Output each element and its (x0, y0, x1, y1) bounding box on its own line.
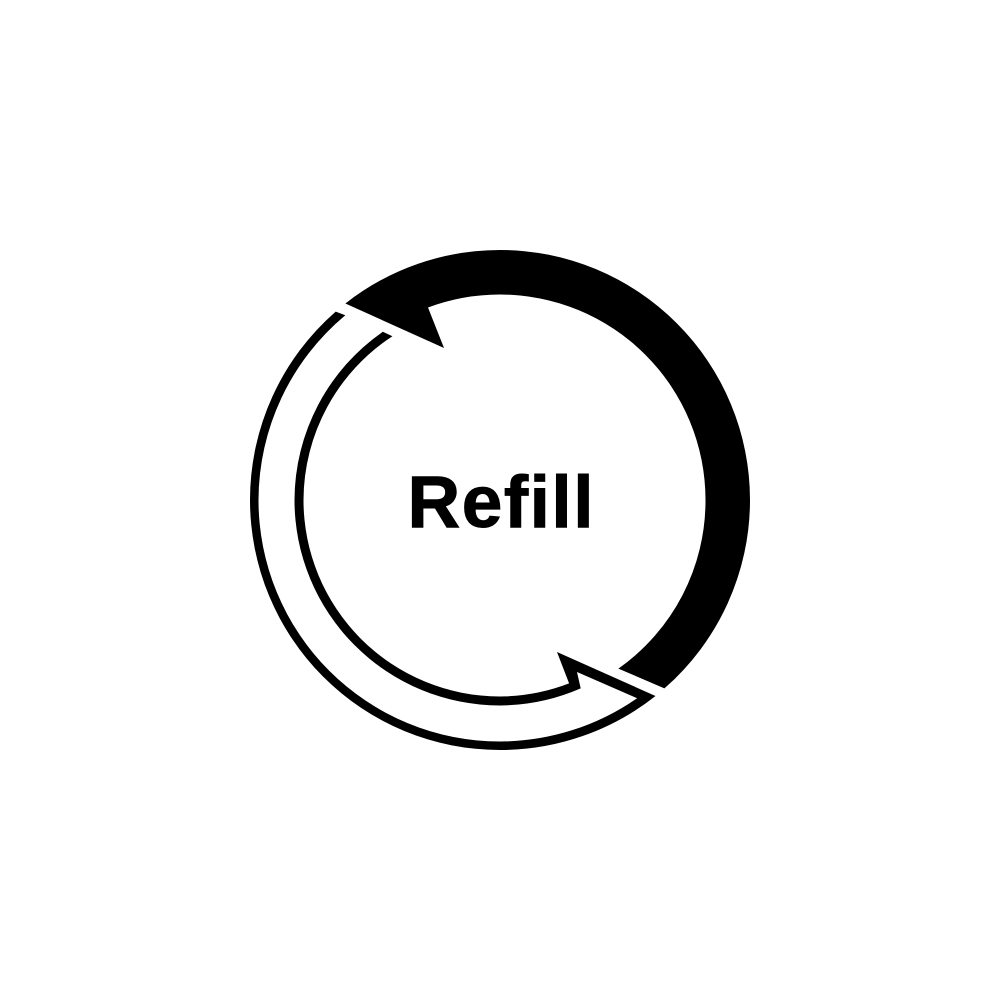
icon: outlined white arrow (250, 312, 656, 750)
center label: Refill: Refill (408, 462, 595, 543)
icon: solid black arrow (345, 250, 750, 688)
